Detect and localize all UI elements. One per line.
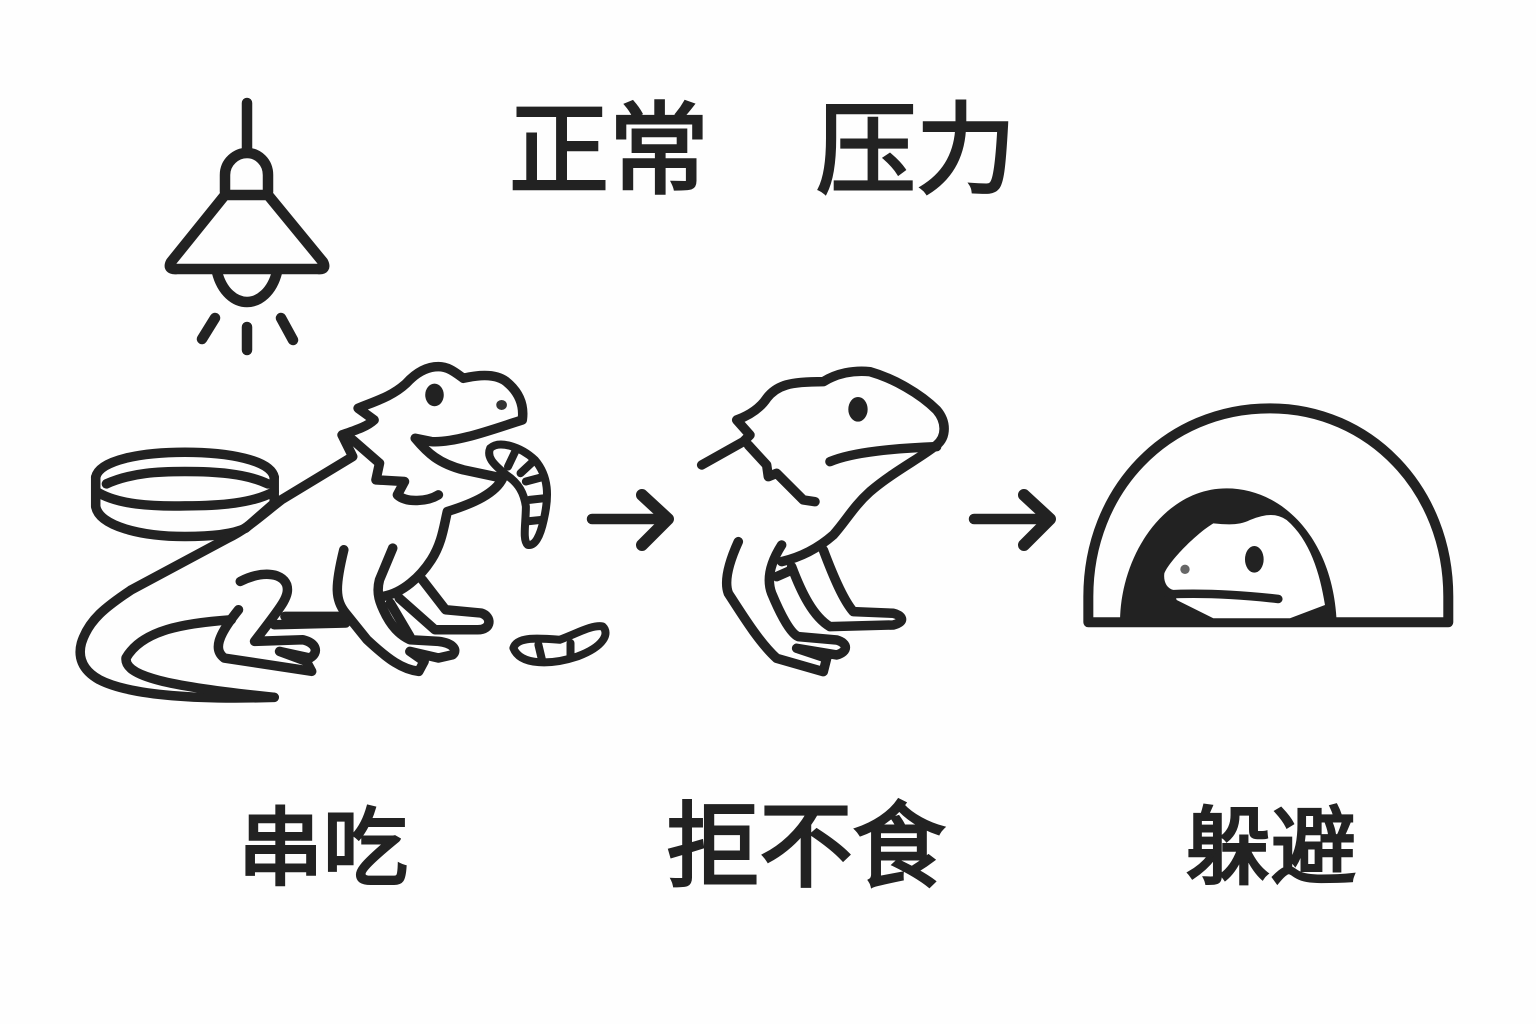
mealworm on ground [513,626,606,662]
nostril [496,400,507,410]
title: normal: 正常 [509,95,709,207]
illustration: lizard hiding in burrow [1088,408,1448,622]
mouth [1168,594,1278,599]
mealworm in mouth [489,445,547,545]
eye [848,397,868,422]
label: eating: 串吃 [238,802,408,897]
title: stress: 压力 [816,95,1016,207]
burrow opening [1120,488,1337,622]
illustration: lizard eating beside a food bowl [80,367,606,698]
eye [1245,546,1264,573]
nostril [1180,565,1190,574]
illustration: lizard refusing food [702,371,944,672]
lizard head [1164,515,1325,618]
food bowl [96,452,274,536]
arrow: refusing food to hiding [974,495,1050,545]
burrow dome [1088,408,1448,622]
lizard body [80,367,523,698]
label: hiding: 躲避 [1186,801,1356,896]
icon: heat lamp [170,103,324,350]
label: refusing food: 拒不食 [666,795,946,899]
eye [425,384,444,406]
arrow: eating to refusing food [592,495,668,545]
